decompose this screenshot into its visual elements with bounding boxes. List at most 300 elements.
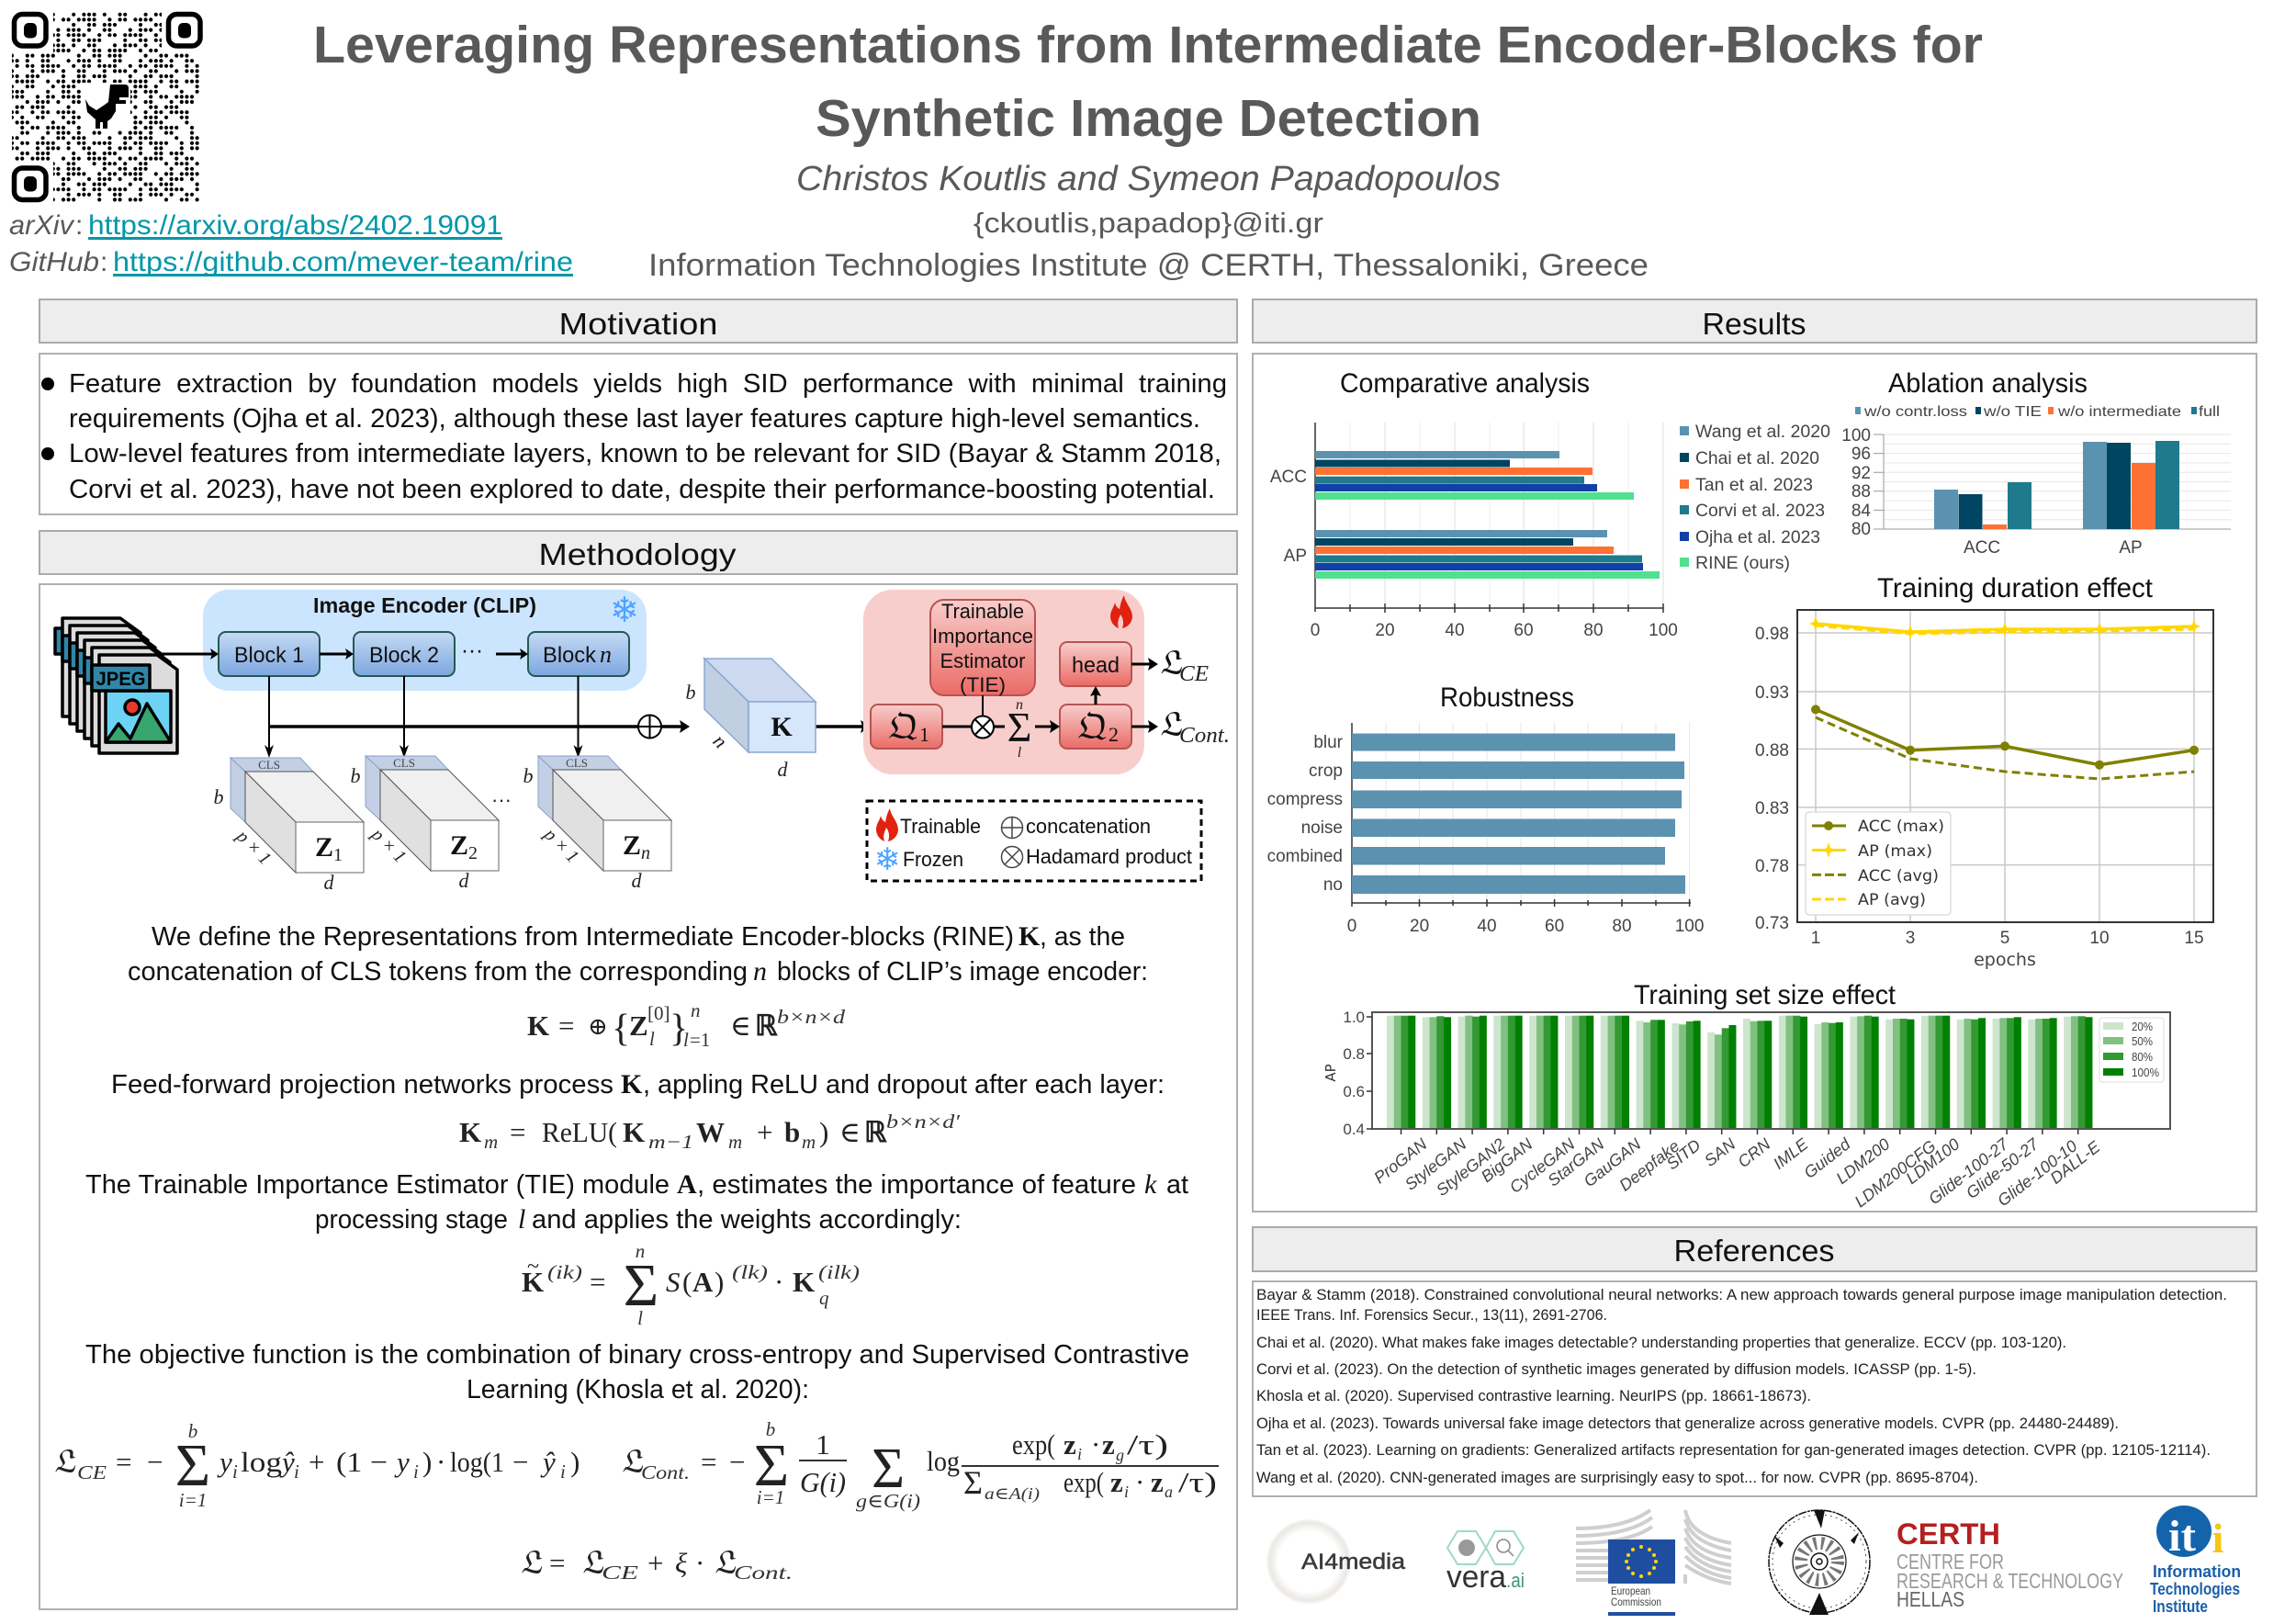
chart: ablation analysis: ACC bbox=[1964, 538, 2000, 558]
equation: contrastive loss: z bbox=[1151, 1466, 1164, 1498]
equation: cross-entropy loss: y bbox=[394, 1446, 410, 1478]
heading: Motivation bbox=[39, 299, 1237, 343]
equation: K bbox=[527, 999, 846, 1051]
equation: cross-entropy loss: · bbox=[436, 1446, 445, 1478]
panel: references bbox=[1253, 1281, 2257, 1496]
panel: motivation: Feature extraction by foundation models yields high SID performance with minimal training bbox=[69, 369, 1227, 399]
logo: European Commission: European bbox=[1611, 1585, 1650, 1597]
equation: Km: m bbox=[728, 1131, 742, 1153]
chart: training set size: Deepfake bbox=[1615, 1136, 1683, 1195]
cuboid Zn: b bbox=[523, 764, 533, 787]
equation: weighted K: (lk) bbox=[732, 1261, 768, 1283]
logo: ITI: Institute bbox=[2153, 1597, 2208, 1616]
chart: comparative analysis: 40 bbox=[1445, 621, 1465, 640]
legend: training duration: ACC (max) bbox=[1858, 818, 1944, 836]
cuboid Z2 bbox=[351, 756, 499, 892]
chart: comparative analysis: 0 bbox=[1311, 621, 1320, 640]
panel: references: Chai et al. (2020). What makes fake images detectable? understanding properties that generalize. ECCV (pp. 103-120). bbox=[1256, 1335, 2066, 1351]
text block: feed-forward bbox=[111, 1069, 1165, 1100]
panel: references: Bayar & Stamm (2018). Constrained convolutional neural networks: A new approach towards general purpose image manipulation detection. bbox=[1256, 1287, 2227, 1303]
panel: references: IEEE Trans. Inf. Forensics Secur., 13(11), 2691-2706. bbox=[1256, 1307, 1607, 1324]
chart: training set size: IMLE bbox=[1770, 1134, 1812, 1173]
cuboid Z2: d bbox=[459, 869, 470, 892]
Q1 box: 𝔔 bbox=[886, 711, 919, 745]
text block: feed-forward: Feed-forward projection networks process bbox=[111, 1070, 613, 1100]
legend: training duration: AP (max) bbox=[1858, 842, 1932, 861]
logo: AI4media bbox=[1266, 1519, 1406, 1604]
chart: ablation analysis: AP bbox=[2119, 538, 2143, 558]
legend: training set size: 50% bbox=[2132, 1034, 2153, 1048]
equation: K: l bbox=[683, 1029, 689, 1051]
Q2 box: 𝔔 bbox=[1075, 711, 1109, 745]
encoder block n: Block bbox=[543, 643, 597, 668]
equation: weighted K: (ik) bbox=[547, 1261, 582, 1283]
chart: training duration: 0.88 bbox=[1755, 741, 1789, 761]
text block: RINE definition: blocks of CLIP’s image encoder: bbox=[777, 957, 1148, 987]
panel: image encoder bbox=[203, 590, 647, 691]
chart: robustness: no bbox=[1323, 875, 1343, 895]
equation: weighted K: q bbox=[819, 1287, 829, 1309]
logo: CERTH text bbox=[1896, 1517, 2123, 1611]
logo: European Commission: Commission bbox=[1611, 1596, 1661, 1608]
text block: TIE bbox=[85, 1169, 1188, 1235]
encoder block 1: Block 1 bbox=[234, 643, 304, 668]
legend: trainable / frozen: Trainable bbox=[900, 815, 981, 838]
cuboid K: n bbox=[709, 729, 732, 752]
chart: training duration: 0.73 bbox=[1755, 914, 1789, 933]
chart: training set size: AP bbox=[1322, 1064, 1339, 1082]
equation: total loss: Cont. bbox=[734, 1562, 793, 1584]
equation: cross-entropy loss: − bbox=[147, 1446, 163, 1478]
chart: training set size: 0.8 bbox=[1343, 1045, 1365, 1063]
equation: Km: b×n×d′ bbox=[886, 1111, 961, 1133]
equation: weighted K: n bbox=[636, 1240, 645, 1262]
logo: vera.ai: vera bbox=[1446, 1560, 1506, 1595]
cuboid K: K bbox=[771, 712, 793, 742]
loss labels: CE bbox=[1179, 662, 1209, 686]
equation: contrastive loss: Σ bbox=[872, 1438, 905, 1500]
loss labels: Cont. bbox=[1179, 724, 1230, 748]
chart: training set size bbox=[1322, 1009, 2170, 1211]
equation: Km: + bbox=[757, 1116, 772, 1148]
equation: cross-entropy loss: y bbox=[217, 1446, 232, 1478]
equation: cross-entropy loss: i=1 bbox=[179, 1489, 207, 1511]
chart: training set size: CycleGAN bbox=[1506, 1134, 1579, 1197]
chart: training duration bbox=[1755, 610, 2213, 970]
cuboid Zn: d bbox=[632, 869, 643, 892]
sum symbol: l bbox=[1018, 745, 1022, 761]
equation: Km: m−1 bbox=[648, 1131, 693, 1153]
equation: weighted K: A bbox=[692, 1266, 714, 1298]
chart: training set size: BigGAN bbox=[1478, 1134, 1536, 1186]
equation: cross-entropy loss: CE bbox=[77, 1461, 107, 1483]
equation: cross-entropy loss: + bbox=[309, 1446, 324, 1478]
series: AP max bbox=[1809, 616, 2200, 639]
cuboid Z2: 2 bbox=[468, 843, 478, 863]
concatenation symbol bbox=[638, 715, 661, 739]
chart: training set size: LDM200CFG bbox=[1851, 1136, 1939, 1211]
chart: comparative analysis: 20 bbox=[1375, 621, 1395, 640]
equation: K: K bbox=[527, 1009, 549, 1042]
TIE box: Importance bbox=[932, 625, 1033, 648]
equation: total loss: ξ bbox=[675, 1547, 688, 1579]
chart heading: robustness: Robustness bbox=[1440, 682, 1574, 713]
equation: K: = bbox=[558, 1009, 574, 1042]
equation: contrastive loss: z bbox=[1064, 1428, 1076, 1460]
equation: contrastive loss: 1 bbox=[816, 1428, 830, 1460]
equation: cross-entropy loss: ) bbox=[570, 1446, 580, 1478]
legend: comparative analysis: Corvi et al. 2023 bbox=[1695, 502, 1825, 521]
heading: Results: Results bbox=[1703, 307, 1806, 341]
legend: ablation: w/o TIE bbox=[1983, 404, 2042, 420]
equation: cross-entropy loss: 𝔏 bbox=[53, 1448, 78, 1478]
equation: Km: m bbox=[802, 1131, 816, 1153]
legend: trainable / frozen: concatenation bbox=[1026, 815, 1151, 838]
equation: contrastive loss: 𝔏 bbox=[621, 1448, 646, 1478]
heading: Methodology: Methodology bbox=[538, 537, 737, 571]
equation: K: ∈ bbox=[730, 1009, 751, 1042]
text block: feed-forward: K bbox=[621, 1069, 643, 1100]
encoder block n: n bbox=[600, 641, 612, 668]
equation: Km: ℝ bbox=[864, 1116, 887, 1148]
equation: cross-entropy loss: ŷ bbox=[540, 1446, 556, 1478]
text block: feed-forward: , appling ReLU and dropout after each layer: bbox=[643, 1070, 1165, 1100]
legend: ablation: w/o contr.loss bbox=[1863, 404, 1967, 420]
legend: training duration: AP (avg) bbox=[1858, 891, 1926, 909]
equation: cross-entropy loss: (1 − bbox=[336, 1446, 388, 1478]
arrows: encoder flow bbox=[162, 638, 871, 758]
panel: motivation: Corvi et al. 2023), have not been explored to date, despite their performance-boosting potential. bbox=[69, 475, 1215, 504]
Q2 box bbox=[1060, 705, 1131, 749]
equation: K: l bbox=[649, 1028, 655, 1050]
chart: training set size: SITD bbox=[1663, 1135, 1704, 1173]
loss labels: 𝔏 bbox=[1159, 649, 1185, 680]
equation: K: { bbox=[612, 1008, 630, 1050]
chart heading: training duration: Training duration effect bbox=[1877, 573, 2154, 603]
legend: comparative analysis: Wang et al. 2020 bbox=[1695, 423, 1830, 442]
legend: trainable / frozen: Hadamard product bbox=[1026, 845, 1192, 868]
panel: results bbox=[1253, 354, 2257, 1212]
series: AP avg bbox=[1816, 626, 2194, 634]
connectors bbox=[942, 658, 1158, 733]
logo: ITI bbox=[2150, 1506, 2241, 1616]
series: 50% bbox=[1394, 1016, 2078, 1129]
legend: training set size bbox=[2099, 1018, 2164, 1082]
chart: robustness: 20 bbox=[1410, 917, 1429, 936]
equation: contrastive loss: i=1 bbox=[757, 1486, 784, 1508]
icon: stack of JPEG images: JPEG bbox=[96, 669, 145, 690]
equation: contrastive loss: b bbox=[766, 1418, 775, 1440]
equation: K: ℝ bbox=[755, 1009, 778, 1042]
cuboid Z1: p × 1 bbox=[231, 825, 275, 869]
logo: CERTH text: CERTH bbox=[1896, 1517, 2000, 1551]
equation: contrastive loss bbox=[621, 1418, 1219, 1512]
title: Leveraging Representations from Intermediate Encoder-Blocks for bbox=[313, 16, 1983, 74]
loss labels: 𝔏 bbox=[1159, 711, 1185, 741]
chart: robustness: 60 bbox=[1545, 917, 1564, 936]
equation: weighted K: · bbox=[774, 1266, 783, 1298]
equation: weighted K: ( bbox=[682, 1266, 692, 1298]
chart: ablation analysis: 96 bbox=[1851, 445, 1871, 464]
chart heading: ablation analysis: Ablation analysis bbox=[1888, 368, 2088, 399]
legend: comparative analysis: Tan et al. 2023 bbox=[1695, 476, 1813, 495]
TIE box bbox=[930, 600, 1035, 696]
equation: K: b×n×d bbox=[777, 1006, 846, 1028]
text block: objective function bbox=[85, 1340, 1189, 1404]
loss labels bbox=[1159, 649, 1230, 748]
chart: training set size: CRN bbox=[1734, 1134, 1774, 1171]
heading: References: References bbox=[1673, 1234, 1835, 1268]
equation: Km: ∈ bbox=[839, 1116, 861, 1148]
chart: training duration: 0.78 bbox=[1755, 857, 1789, 876]
arXiv link: : bbox=[75, 210, 83, 241]
chart: training duration: 5 bbox=[2000, 929, 2009, 948]
cuboid Zn bbox=[523, 756, 671, 892]
equation: weighted K: ) bbox=[715, 1266, 724, 1298]
chart: training set size: 1.0 bbox=[1343, 1009, 1365, 1026]
chart: robustness bbox=[1267, 723, 1704, 936]
equation: cross-entropy loss bbox=[53, 1420, 580, 1511]
equation: weighted K: (ilk) bbox=[818, 1261, 860, 1283]
cuboid K: d bbox=[777, 758, 788, 781]
logo: ITI: it bbox=[2168, 1512, 2196, 1561]
chart: ablation analysis: 80 bbox=[1851, 520, 1871, 539]
equation: contrastive loss: i bbox=[1124, 1483, 1129, 1501]
cuboid Z1 bbox=[213, 758, 364, 894]
equation: contrastive loss: z bbox=[1102, 1428, 1115, 1460]
equation: contrastive loss: exp( bbox=[1012, 1428, 1055, 1460]
cuboid Zn: p × 1 bbox=[539, 823, 582, 867]
series: 100% bbox=[1408, 1016, 2092, 1129]
cuboid K bbox=[685, 659, 816, 781]
text block: RINE definition bbox=[128, 921, 1148, 987]
equation: cross-entropy loss: i bbox=[560, 1460, 566, 1483]
equation: weighted K: S bbox=[666, 1266, 680, 1298]
title: Synthetic Image Detection bbox=[816, 89, 1481, 148]
chart: training duration: epochs bbox=[1974, 950, 2036, 970]
legend: ablation bbox=[1855, 404, 2220, 420]
encoder block 1 bbox=[219, 632, 320, 676]
chart: comparative analysis: 60 bbox=[1514, 621, 1534, 640]
arXiv link: arXiv bbox=[9, 210, 75, 241]
equation: K: ⊕ bbox=[588, 1013, 608, 1040]
text block: TIE: The Trainable Importance Estimator (TIE) module bbox=[85, 1170, 670, 1200]
legend: training duration bbox=[1806, 812, 1951, 915]
sum symbol: n bbox=[1016, 697, 1023, 713]
chart: training set size: Glide-50-27 bbox=[1963, 1134, 2043, 1202]
legend: training set size: 20% bbox=[2132, 1020, 2153, 1033]
chart: training set size: 0.4 bbox=[1343, 1121, 1365, 1138]
equation: cross-entropy loss: i bbox=[294, 1460, 299, 1483]
chart: training set size: GauGAN bbox=[1581, 1134, 1645, 1190]
equation: Km: ReLU( bbox=[542, 1116, 617, 1148]
equation: weighted K: l bbox=[637, 1307, 643, 1329]
equation: contrastive loss: a bbox=[1165, 1483, 1173, 1501]
text block: RINE definition: concatenation of CLS tokens from the corresponding bbox=[128, 957, 748, 987]
cuboid Z1: 1 bbox=[333, 845, 343, 865]
series: ACC max bbox=[1811, 705, 2199, 770]
chart: robustness: blur bbox=[1313, 733, 1344, 752]
equation: weighted K: K bbox=[522, 1266, 544, 1298]
equation: contrastive loss: a∈A(i) bbox=[985, 1484, 1040, 1504]
cuboid Z2: p × 1 bbox=[366, 823, 410, 867]
equation: contrastive loss: Σ bbox=[754, 1432, 789, 1499]
panel: image encoder: ❄ bbox=[610, 592, 639, 630]
equation: contrastive loss: − bbox=[729, 1446, 745, 1478]
equation: cross-entropy loss: ŷ bbox=[279, 1446, 295, 1478]
Q2 box: 2 bbox=[1109, 723, 1119, 746]
TIE box: Estimator bbox=[940, 649, 1025, 672]
icon: stack of JPEG images bbox=[55, 618, 177, 753]
logo: AI4media: AI4media bbox=[1301, 1550, 1406, 1574]
chart: comparative analysis: 100 bbox=[1649, 621, 1678, 640]
text block: TIE: , estimates the importance of feature bbox=[697, 1170, 1136, 1200]
equation: K: =1 bbox=[690, 1029, 710, 1051]
panel: motivation: requirements (Ojha et al. 2023), although these last layer features capture high-level semantics. bbox=[69, 404, 1200, 434]
cuboid Zn: Z bbox=[623, 830, 641, 861]
chart: comparative analysis: AP bbox=[1284, 547, 1307, 566]
chart: training set size: StyleGAN2 bbox=[1433, 1134, 1508, 1200]
equation: Km: K bbox=[623, 1116, 645, 1148]
equation: contrastive loss: z bbox=[1110, 1466, 1123, 1498]
TIE box: (TIE) bbox=[960, 673, 1006, 696]
equation: weighted K bbox=[522, 1240, 860, 1329]
logo: European Commission bbox=[1576, 1510, 1731, 1616]
encoder block 2: Block 2 bbox=[369, 643, 439, 668]
chart: robustness: 40 bbox=[1477, 917, 1497, 936]
text block: objective function: The objective function is the combination of binary cross-entropy and Supervised Contrastive bbox=[85, 1340, 1189, 1370]
chart: ablation analysis bbox=[1841, 426, 2231, 558]
cuboid Z2: b bbox=[351, 764, 360, 787]
logo: ITI: i bbox=[2212, 1515, 2224, 1562]
equation: cross-entropy loss: i bbox=[413, 1460, 419, 1483]
chart: training duration: 15 bbox=[2184, 929, 2204, 948]
cuboid Z2: Z bbox=[450, 830, 468, 861]
cuboid Z1: b bbox=[213, 785, 224, 808]
text block: objective function: Learning (Khosla et al. 2020): bbox=[467, 1375, 809, 1404]
legend: training set size: 80% bbox=[2132, 1050, 2153, 1064]
chart: training duration: 0.93 bbox=[1755, 683, 1789, 703]
equation: weighted K: ~ bbox=[527, 1255, 539, 1279]
logo: CERTH text: RESEARCH & TECHNOLOGY bbox=[1896, 1569, 2123, 1593]
equation: contrastive loss: G(i) bbox=[800, 1466, 846, 1498]
equation: total loss: 𝔏 bbox=[581, 1549, 606, 1579]
equation: K: } bbox=[670, 1008, 688, 1050]
legend: comparative analysis: Ojha et al. 2023 bbox=[1695, 528, 1820, 547]
chart: ablation analysis: 100 bbox=[1841, 426, 1871, 445]
chart: robustness: 0 bbox=[1347, 917, 1356, 936]
head box bbox=[1060, 642, 1131, 686]
equation: contrastive loss: /τ) bbox=[1178, 1466, 1217, 1498]
equation: contrastive loss: Cont. bbox=[641, 1461, 690, 1483]
GitHub link: GitHub bbox=[9, 247, 99, 277]
logo: CERTH text: HELLAS bbox=[1896, 1587, 1964, 1611]
panel: references: Corvi et al. (2023). On the detection of synthetic images generated by diffusion models. ICASSP (pp. 1-5). bbox=[1256, 1361, 1976, 1378]
text block: RINE definition: K bbox=[1019, 921, 1041, 952]
equation: total loss: · bbox=[695, 1547, 704, 1579]
chart: comparative analysis: 80 bbox=[1583, 621, 1604, 640]
text block: RINE definition: , as the bbox=[1040, 922, 1125, 952]
ellipsis between cuboids: ··· bbox=[491, 788, 512, 811]
equation: total loss: 𝔏 bbox=[520, 1549, 545, 1579]
cuboid Z1: d bbox=[323, 871, 334, 894]
equation: cross-entropy loss: = bbox=[116, 1446, 131, 1478]
equation: contrastive loss: Σ bbox=[963, 1464, 983, 1501]
legend: trainable / frozen: ❄ bbox=[874, 842, 900, 877]
chart: training set size: StyleGAN bbox=[1401, 1134, 1470, 1194]
Q1 box: 1 bbox=[919, 723, 929, 746]
legend: trainable / frozen: Frozen bbox=[903, 848, 963, 871]
equation: contrastive loss: i bbox=[1077, 1445, 1082, 1463]
icon: flame legend bbox=[876, 808, 898, 841]
arXiv link: https://arxiv.org/abs/2402.19091 bbox=[88, 210, 502, 241]
chart: training duration: 3 bbox=[1906, 929, 1915, 948]
panel: references: Ojha et al. (2023). Towards universal fake image detectors that generalize across generative models. CVPR (pp. 24480-24489). bbox=[1256, 1415, 2119, 1432]
chart: robustness: crop bbox=[1309, 761, 1343, 781]
equation: weighted K: K bbox=[793, 1266, 815, 1298]
chart: training set size: DALL-E bbox=[2046, 1137, 2104, 1188]
authors: Christos Koutlis and Symeon Papadopoulos bbox=[796, 160, 1501, 198]
cuboid Zn: n bbox=[641, 843, 650, 863]
text block: TIE: l bbox=[518, 1204, 525, 1235]
equation: total loss bbox=[520, 1547, 793, 1584]
Q1 box bbox=[871, 705, 942, 749]
cuboid Zn: CLS bbox=[566, 756, 588, 770]
equation: contrastive loss: g∈G(i) bbox=[856, 1490, 920, 1512]
GitHub link: https://github.com/mever-team/rine bbox=[113, 247, 573, 277]
legend: comparative analysis: RINE (ours) bbox=[1695, 554, 1790, 573]
heading: Results bbox=[1253, 299, 2257, 343]
chart: robustness: noise bbox=[1301, 818, 1343, 838]
logo: CERTH emblem bbox=[1769, 1510, 1870, 1615]
panel: references: Tan et al. (2023). Learning on gradients: Generalized artifacts representation for gan-generated images detection. CVPR (pp. 12105-12114). bbox=[1256, 1442, 2211, 1459]
logo: vera.ai: .ai bbox=[1506, 1569, 1525, 1592]
TIE box: Trainable bbox=[941, 600, 1024, 623]
equation: contrastive loss: · bbox=[1091, 1428, 1100, 1460]
sum symbol: Σ bbox=[1007, 704, 1031, 750]
series: 80% bbox=[1401, 1016, 2086, 1129]
chart: comparative analysis: ACC bbox=[1270, 468, 1307, 487]
panel: motivation bbox=[39, 354, 1237, 514]
legend: trainable / frozen bbox=[867, 801, 1201, 881]
chart: ablation analysis: 88 bbox=[1851, 482, 1871, 502]
chart: training set size: Glide-100-10 bbox=[1994, 1136, 2080, 1210]
arrows: encoder flow: ··· bbox=[461, 638, 483, 663]
panel: trainable head bbox=[863, 590, 1158, 774]
chart: robustness: combined bbox=[1267, 847, 1343, 866]
chart heading: comparative analysis: Comparative analysis bbox=[1340, 368, 1590, 399]
panel: methodology bbox=[39, 584, 1237, 1609]
equation: Km: K bbox=[459, 1116, 481, 1148]
text block: TIE: k bbox=[1144, 1169, 1157, 1200]
equation: cross-entropy loss: i bbox=[232, 1460, 238, 1483]
chart: training set size: Guided bbox=[1800, 1134, 1854, 1182]
logo: CERTH text: CENTRE FOR bbox=[1896, 1550, 2004, 1573]
equation: cross-entropy loss: log(1 bbox=[450, 1446, 504, 1478]
equation: Km: W bbox=[696, 1116, 725, 1148]
text block: TIE: processing stage bbox=[315, 1205, 508, 1235]
cuboid Z1: Z bbox=[315, 832, 333, 863]
series: 20% bbox=[1387, 1016, 2071, 1129]
equation: cross-entropy loss: ) bbox=[422, 1446, 432, 1478]
cuboid Z2: CLS bbox=[393, 756, 415, 770]
text block: TIE: and applies the weights accordingly: bbox=[532, 1205, 962, 1235]
equation: Km: b bbox=[784, 1116, 800, 1148]
logo: vera.ai bbox=[1446, 1531, 1525, 1595]
equation: contrastive loss: = bbox=[701, 1446, 716, 1478]
GitHub link: : bbox=[100, 247, 107, 277]
equation: cross-entropy loss: log bbox=[241, 1446, 282, 1478]
